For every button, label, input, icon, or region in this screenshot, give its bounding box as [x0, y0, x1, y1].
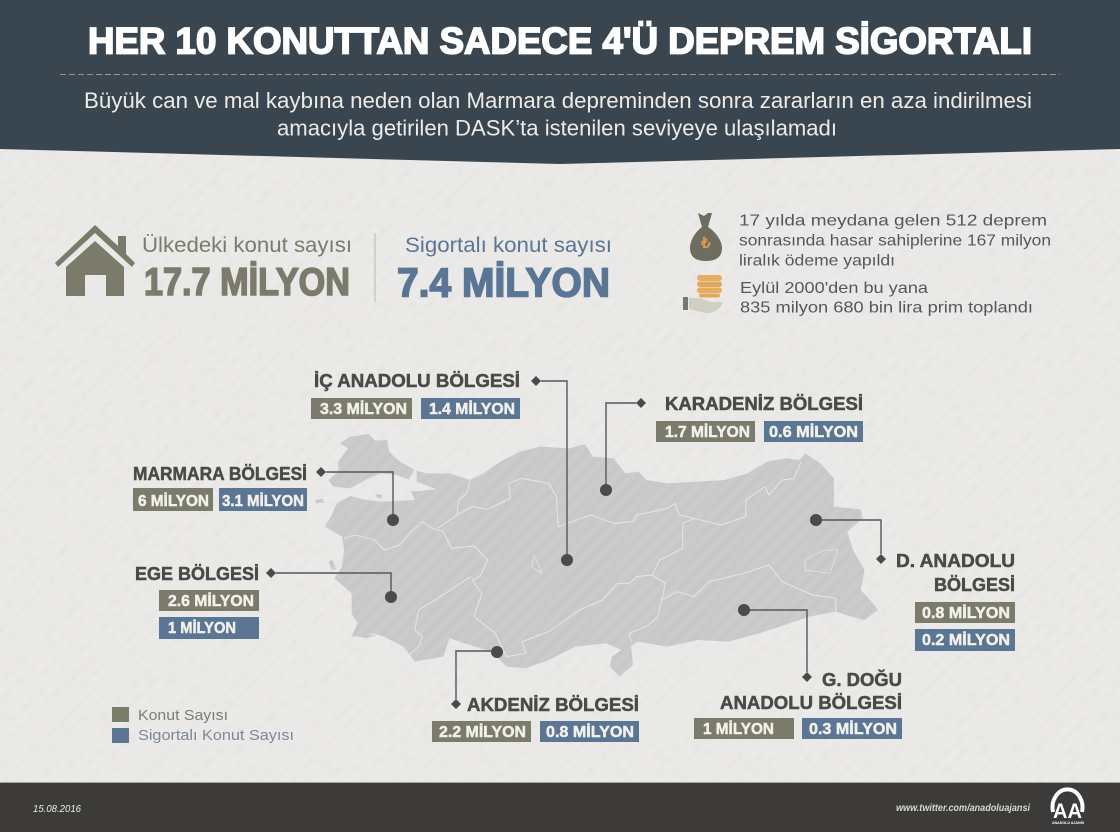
date: 15.08.2016 — [33, 803, 81, 815]
text: premium: 835 milyon 680 bin lira prim toplandı — [740, 300, 1033, 316]
text: payout: 17 yılda meydana gelen 512 deprem — [739, 212, 1047, 230]
logo: Anadolu Ajansı: ANADOLU AJANSI — [1052, 820, 1084, 825]
text: payout: liralık ödeme yapıldı — [739, 252, 895, 270]
subtitle: Büyük can ve mal kaybına neden olan Marmara depreminden sonra zararların en aza indirilmesi — [84, 88, 1032, 113]
region: Doğu Anadolu: 0.2 MİLYON — [922, 631, 1010, 649]
region: Marmara: 6 MİLYON — [138, 492, 209, 510]
legend — [112, 707, 294, 744]
legend: Konut Sayısı — [138, 707, 228, 724]
map: Turkey regions — [315, 434, 878, 677]
stat: insured housing: Sigortalı konut sayısı — [405, 233, 612, 257]
region: Akdeniz: AKDENİZ BÖLGESİ — [467, 695, 639, 715]
region: İç Anadolu — [311, 371, 573, 566]
subtitle: amacıyla getirilen DASK’ta istenilen seviyeye ulaşılamadı — [277, 116, 837, 140]
region: Doğu Anadolu: D. ANADOLU — [896, 551, 1015, 571]
region: İç Anadolu: 3.3 MİLYON — [320, 400, 407, 418]
icon: money bag — [690, 213, 722, 261]
icon: coins and hand — [683, 275, 723, 313]
region: Karadeniz: KARADENİZ BÖLGESİ — [665, 394, 863, 414]
icon: house — [55, 225, 135, 296]
region: Güneydoğu Anadolu — [694, 604, 902, 739]
region: Marmara: MARMARA BÖLGESİ — [133, 464, 307, 484]
logo: Anadolu Ajansı: AA — [1053, 800, 1082, 823]
text: payout: sonrasında hasar sahiplerine 167 milyon — [739, 232, 1051, 250]
region: Akdeniz: 2.2 MİLYON — [439, 723, 526, 741]
region: Doğu Anadolu: 0.8 MİLYON — [922, 604, 1010, 622]
region: Doğu Anadolu: BÖLGESİ — [934, 575, 1015, 595]
region: Ege: 2.6 MİLYON — [168, 592, 254, 610]
source link: www.twitter.com/anadoluajansi — [896, 802, 1031, 814]
stat: total housing — [142, 233, 352, 304]
region: Karadeniz: 1.7 MİLYON — [665, 423, 750, 441]
region: Karadeniz — [600, 394, 863, 496]
region: Marmara: 3.1 MİLYON — [222, 492, 304, 510]
icon: money bag: ₺ — [700, 235, 711, 252]
region: İç Anadolu: 1.4 MİLYON — [429, 400, 515, 418]
logo: Anadolu Ajansı — [1052, 789, 1084, 825]
stat: insured housing: 7.4 MİLYON — [397, 260, 610, 306]
region: Karadeniz: 0.6 MİLYON — [769, 423, 858, 441]
region: Ege: EGE BÖLGESİ — [135, 564, 259, 584]
stat: insured housing — [397, 233, 612, 306]
region: Güneydoğu Anadolu: ANADOLU BÖLGESİ — [720, 693, 902, 713]
region: Akdeniz — [432, 646, 639, 742]
region: Güneydoğu Anadolu: G. DOĞU — [822, 669, 902, 690]
region: Doğu Anadolu — [810, 514, 1015, 651]
region: Marmara — [133, 464, 399, 526]
stat: total housing: Ülkedeki konut sayısı — [142, 233, 352, 257]
region: Güneydoğu Anadolu: 1 MİLYON — [703, 720, 774, 738]
region: Ege: 1 MİLYON — [168, 619, 236, 637]
title: HER 10 KONUTTAN SADECE 4'Ü DEPREM SİGORTALI — [88, 20, 1032, 62]
region: Akdeniz: 0.8 MİLYON — [546, 723, 634, 741]
region: İç Anadolu: İÇ ANADOLU BÖLGESİ — [314, 371, 520, 391]
region: Ege — [135, 564, 397, 639]
header band — [0, 0, 1120, 164]
stat: total housing: 17.7 MİLYON — [144, 261, 350, 304]
legend: Sigortalı Konut Sayısı — [138, 727, 294, 744]
region: Güneydoğu Anadolu: 0.3 MİLYON — [809, 720, 897, 738]
text: premium: Eylül 2000'den bu yana — [740, 280, 928, 297]
footer bar — [0, 782, 1120, 832]
